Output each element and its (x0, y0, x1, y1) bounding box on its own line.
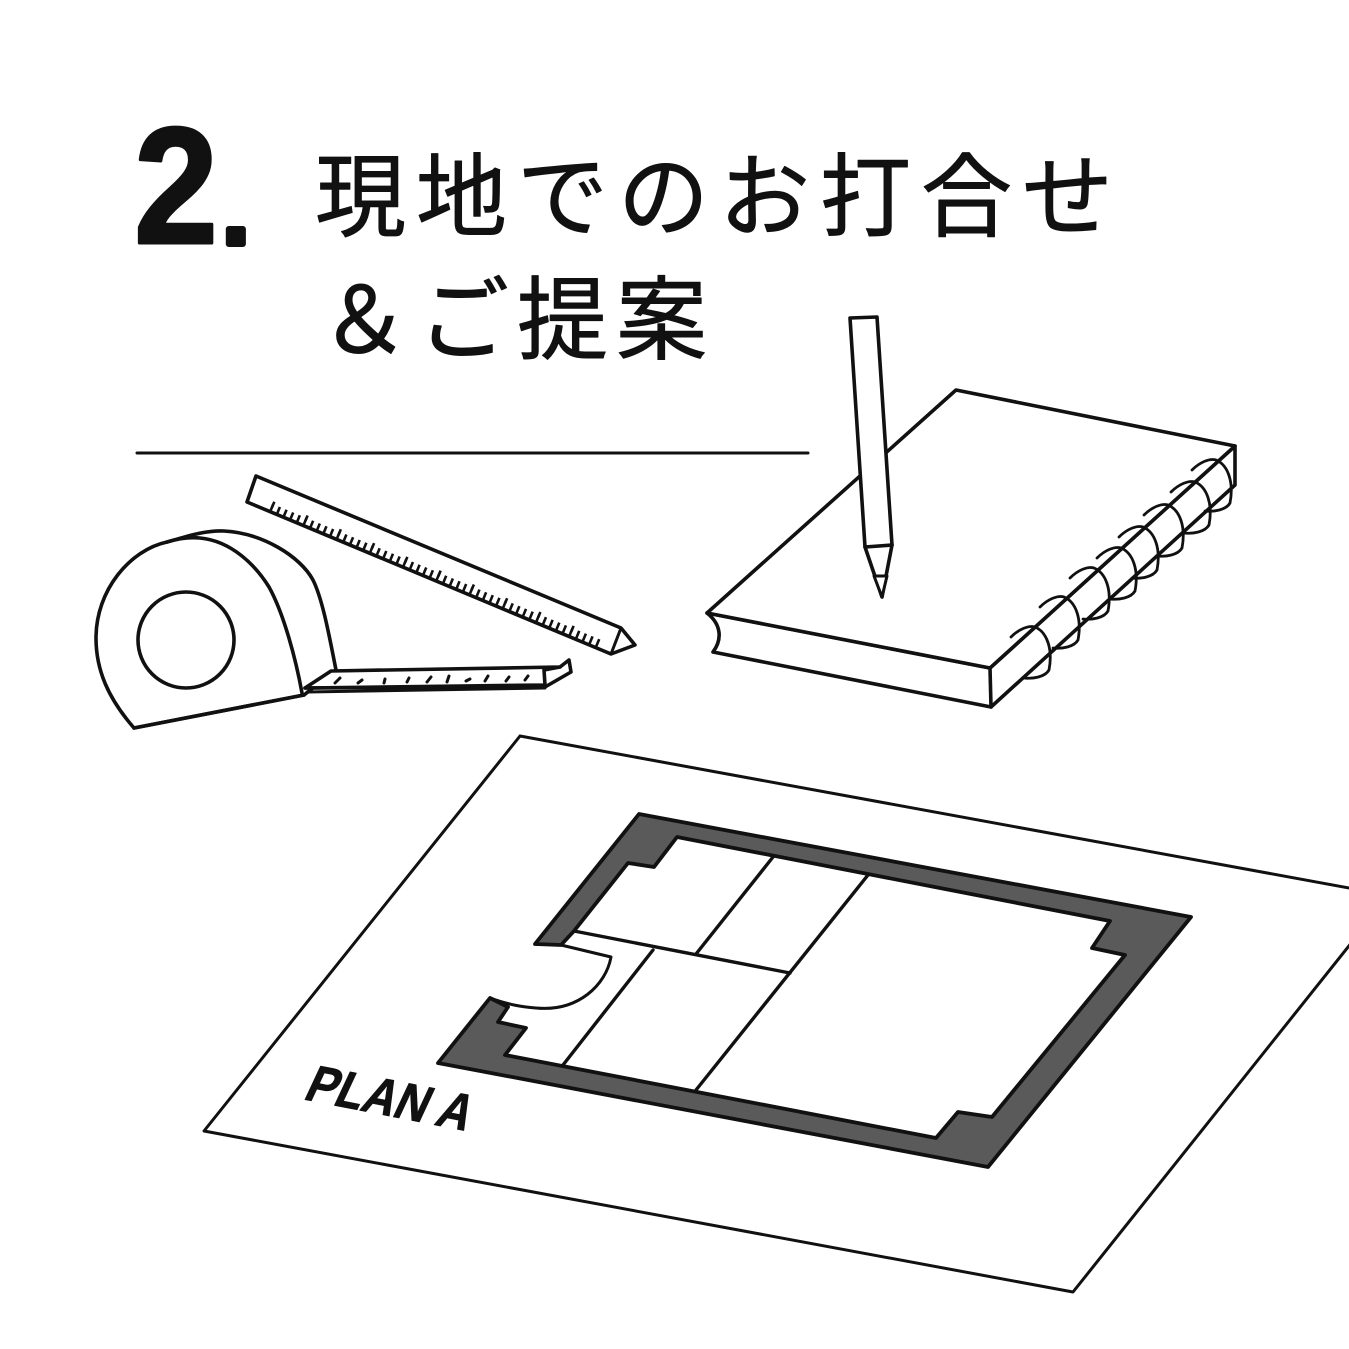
plan label: PLAN A (297, 1056, 485, 1142)
entrance door arc (490, 945, 611, 1008)
title heading: 現地でのお打合せ (315, 148, 1123, 249)
spiral rings (1011, 459, 1231, 678)
title heading (315, 148, 1123, 372)
interior walls (563, 857, 868, 1090)
title number: 2 (134, 94, 218, 279)
title number: . (222, 154, 250, 266)
icon: spiral notebook (707, 390, 1235, 707)
icon: tape measure (96, 531, 571, 728)
floor plan walls (438, 814, 1191, 1167)
title heading: ＆ご提案 (319, 271, 715, 372)
tape blade (305, 660, 571, 692)
icon: triangular ruler (247, 476, 635, 654)
icon: pencil (850, 317, 892, 597)
floor plan sheet (204, 736, 1349, 1292)
